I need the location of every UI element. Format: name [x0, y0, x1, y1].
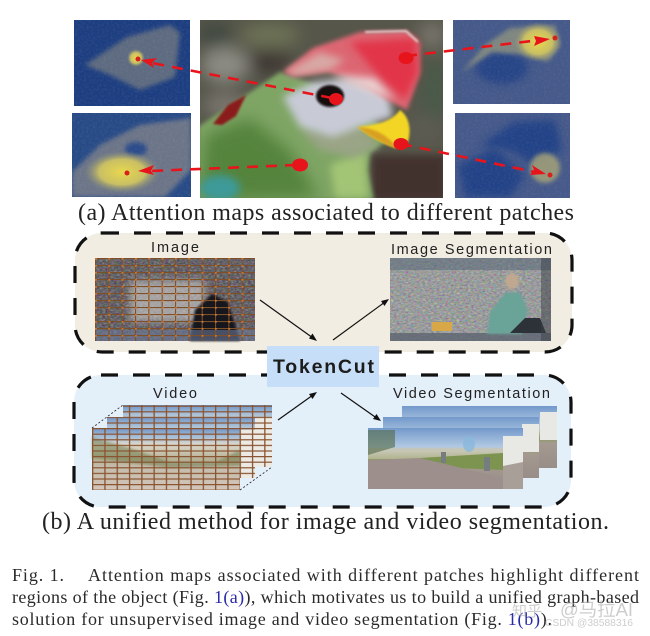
figure caption: Fig. 1.	[12, 565, 64, 585]
watermark: 知乎	[512, 603, 542, 620]
figure caption	[12, 565, 639, 630]
body	[198, 72, 395, 200]
figure caption: Attention maps associated with different patches highlight different	[88, 565, 639, 585]
label: Image: Image	[151, 240, 199, 256]
arrow: eye to top-left map	[141, 58, 343, 105]
TokenCut box	[267, 346, 379, 387]
arrow: video to TokenCut	[278, 392, 317, 420]
TokenCut box: TokenCut	[273, 356, 374, 378]
panel: video branch	[74, 375, 571, 507]
segmented video frames	[368, 406, 557, 489]
label: Video: Video	[153, 386, 197, 402]
crown	[283, 31, 420, 110]
watermark: @马拉AI	[560, 600, 633, 620]
label: Video Segmentation: Video Segmentation	[393, 386, 550, 402]
figure caption: regions of the object (Fig. 1(a)), which motivates us to build a unified graph-based	[12, 587, 639, 608]
arrow: TokenCut to image segmentation	[333, 299, 389, 340]
arrow: TokenCut to video segmentation	[341, 393, 381, 421]
arrow: crown to top-right map	[398, 36, 550, 64]
label: Image Segmentation: Image Segmentation	[391, 242, 552, 258]
figure caption: solution for unsupervised image and video segmentation (Fig. 1(b)).	[12, 609, 552, 630]
arrow: beak to bottom-right map	[394, 138, 546, 175]
watermark: CSDN @38588316	[545, 617, 633, 629]
panel: attention map top right	[453, 20, 570, 104]
photo: bird	[197, 20, 449, 201]
cheek	[283, 78, 393, 137]
panel: attention map top left	[74, 20, 190, 106]
caption (a): (a) Attention maps associated to different patches	[78, 200, 574, 226]
panel: attention map bottom right	[455, 113, 570, 198]
throat	[300, 125, 380, 158]
watermark	[512, 600, 633, 629]
arrows: patch to attention map	[138, 36, 550, 175]
image with patch grid	[95, 258, 255, 341]
segmented image	[390, 258, 551, 341]
panel: image branch	[75, 233, 572, 352]
panel: attention map bottom left	[72, 113, 191, 197]
arrow: image to TokenCut	[260, 300, 317, 341]
arrow: body to bottom-left map	[138, 158, 308, 175]
video cube with patch grid	[92, 405, 272, 490]
beak	[358, 110, 410, 148]
red patch	[213, 95, 246, 125]
caption (b): (b) A unified method for image and video segmentation.	[42, 509, 609, 535]
photo background	[197, 20, 449, 201]
eye	[316, 85, 344, 107]
